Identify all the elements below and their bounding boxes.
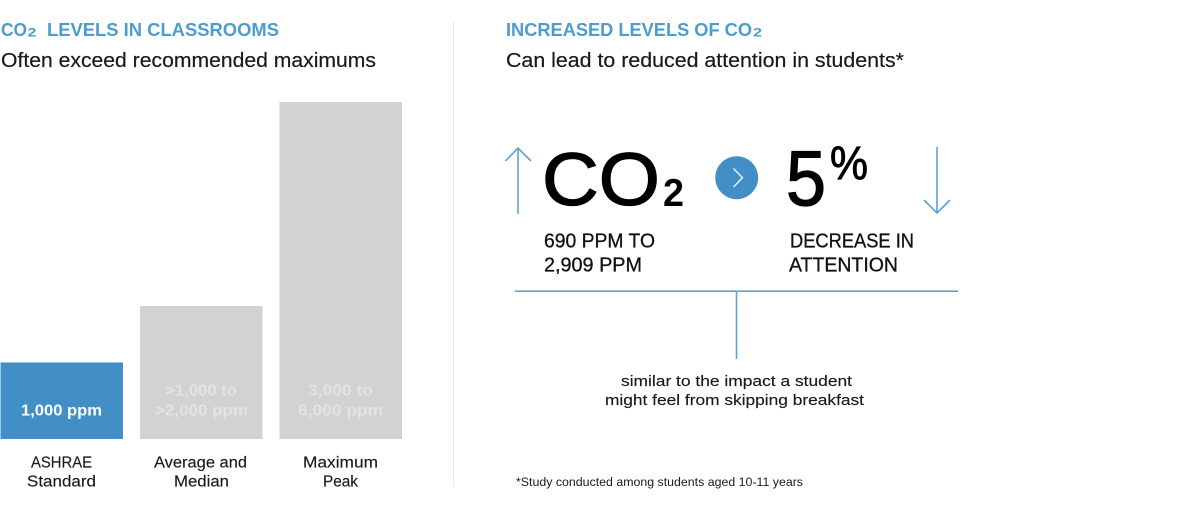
label: maximum peak: Maximum (303, 454, 378, 472)
label: average and median: Median (174, 474, 229, 490)
panel: increased levels of CO2 (506, 20, 958, 489)
bar: average and median: >2,000 ppm (155, 402, 248, 420)
label: ASHRAE standard (27, 454, 96, 490)
bar: average and median (140, 306, 262, 439)
caption: 690 ppm to 2,909 ppm: 2,909 PPM (544, 254, 642, 276)
label: maximum peak: Peak (323, 474, 358, 490)
heading: CO2 levels in classrooms: LEVELS IN CLASSROOMS (47, 20, 279, 40)
stat: CO2: 2 (663, 172, 684, 215)
caption: 690 ppm to 2,909 ppm (544, 230, 655, 276)
caption: 690 ppm to 2,909 ppm: 690 PPM TO (544, 230, 655, 252)
bar: average and median: >1,000 to (165, 382, 237, 400)
note: skipping breakfast comparison: similar to the impact a student (621, 373, 853, 390)
stat: CO2: CO (542, 138, 660, 221)
subheading: can lead to reduced attention: Can lead to reduced attention in students* (506, 50, 904, 72)
caption: decrease in attention: ATTENTION (789, 254, 898, 276)
heading: CO2 levels in classrooms: 2 (28, 26, 37, 40)
bar: ASHRAE standard (0, 362, 123, 439)
icon: up arrow (506, 148, 531, 214)
stat: 5 percent: 5 (786, 134, 826, 222)
caption: decrease in attention (789, 230, 914, 276)
label: ASHRAE standard: Standard (27, 474, 96, 490)
label: ASHRAE standard: ASHRAE (31, 454, 92, 472)
icon: chevron circle (715, 156, 758, 199)
stat: 5 percent: % (830, 136, 868, 189)
icon: down arrow (924, 147, 950, 213)
label: average and median (154, 454, 247, 490)
heading: increased levels of CO2: 2 (753, 26, 762, 40)
bar: maximum peak (280, 102, 402, 439)
caption: decrease in attention: DECREASE IN (790, 230, 914, 252)
footnote: *Study conducted among students aged 10-11 years (516, 477, 803, 489)
stat: 5 percent (786, 134, 868, 222)
label: maximum peak (303, 454, 378, 490)
bar: maximum peak: 3,000 to (308, 382, 373, 400)
bar: maximum peak: 6,000 ppm (298, 402, 383, 420)
bar: ASHRAE standard: 1,000 ppm (21, 402, 102, 420)
panel: CO2 levels in classrooms (0, 20, 402, 490)
connector bracket (515, 291, 958, 359)
heading: increased levels of CO2: INCREASED LEVELS OF CO (506, 20, 752, 40)
heading: CO2 levels in classrooms: CO (1, 20, 27, 40)
label: average and median: Average and (154, 454, 247, 472)
note: skipping breakfast comparison: might feel from skipping breakfast (605, 392, 865, 409)
subheading: often exceed recommended maximums: Often exceed recommended maximums (1, 50, 376, 72)
note: skipping breakfast comparison (605, 373, 865, 409)
